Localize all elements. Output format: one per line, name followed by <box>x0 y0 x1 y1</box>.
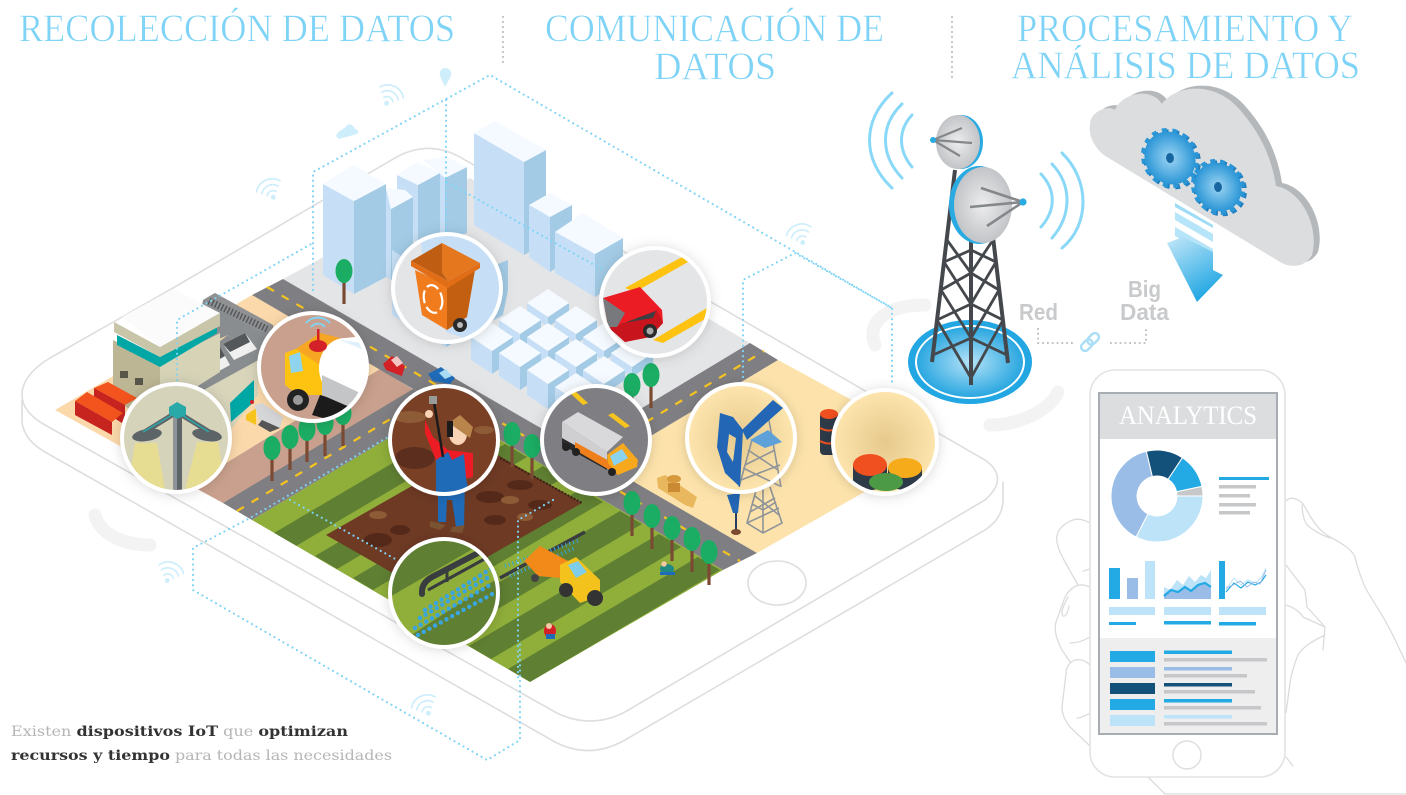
donut legend <box>1219 477 1269 514</box>
cloud with gears <box>1090 86 1320 302</box>
city ground <box>283 178 750 449</box>
circle: oil pump <box>687 384 795 492</box>
connector between red and big data <box>1038 328 1146 353</box>
wireless tower <box>870 93 1083 404</box>
caption text: Existen dispositivos IoT que optimizan <box>11 724 348 740</box>
analytics header: ANALYTICS <box>1119 401 1257 430</box>
area chart <box>1164 570 1211 599</box>
farmer legs <box>430 480 465 533</box>
line chart <box>1219 561 1266 599</box>
analytics header <box>1100 394 1276 439</box>
small red car <box>383 356 405 376</box>
title: procesamiento y análisis de datos <box>1011 7 1360 87</box>
title: comunicación de datos: COMUNICACIÓN DE <box>545 6 884 50</box>
donut chart <box>1111 450 1203 542</box>
title: procesamiento y análisis de datos: PROCESAMIENTO Y <box>1017 7 1353 50</box>
table panel <box>1100 638 1276 733</box>
circle: red car <box>601 248 709 356</box>
fuel truck <box>246 400 283 432</box>
title: comunicación de datos: DATOS <box>654 45 776 88</box>
small dish <box>930 115 983 169</box>
factory wing roof <box>160 335 262 392</box>
title: procesamiento y análisis de datos: ANÁLISIS DE DATOS <box>1011 43 1360 87</box>
factory wing wall <box>200 358 258 428</box>
circle: irrigation sprinkler <box>384 537 501 654</box>
buildings <box>323 121 623 347</box>
gear small <box>1191 158 1246 218</box>
factory ground <box>55 295 380 485</box>
tower base <box>908 320 1032 404</box>
large dish <box>949 166 1027 244</box>
label: big data <box>1120 276 1169 325</box>
low blocks <box>471 289 653 416</box>
roof grate <box>203 293 273 333</box>
title: comunicación de datos <box>545 6 884 88</box>
tractor with tank <box>500 532 603 606</box>
pipe valve <box>657 475 697 508</box>
circle: farmer with sensor <box>390 386 498 500</box>
caption text: recursos y tiempo para todas las necesidades <box>11 748 392 764</box>
tower lattice <box>932 170 1008 385</box>
faded background arcs <box>95 305 1058 545</box>
caption text <box>11 724 392 764</box>
label: big data: Big <box>1128 276 1161 302</box>
isometric map <box>55 121 905 682</box>
right road <box>574 343 778 465</box>
bar chart <box>1109 561 1155 599</box>
field worker 2 <box>660 561 675 575</box>
bin interior and rim <box>411 243 448 281</box>
trees <box>264 259 718 585</box>
floating wifi and cloud icons <box>155 68 815 720</box>
label: big data: Data <box>1120 299 1169 325</box>
circle: oil barrels <box>833 390 937 494</box>
smartphone <box>1090 370 1285 777</box>
office tower <box>113 340 160 425</box>
field worker <box>544 623 556 639</box>
chart captions <box>1109 607 1266 626</box>
service lot <box>195 293 275 358</box>
label: red: Red <box>1019 299 1058 325</box>
left road <box>223 389 442 520</box>
red containers <box>75 382 137 435</box>
hand holding phone <box>1055 498 1406 794</box>
skylights <box>170 333 257 388</box>
bin body <box>415 270 447 330</box>
tablet device outline <box>22 148 1003 751</box>
oil field ground <box>602 360 905 553</box>
signal waves right <box>1041 153 1083 248</box>
dotted network lines <box>177 75 892 760</box>
circle: street lamp <box>122 384 230 492</box>
outside barrel <box>820 409 838 455</box>
teal door <box>230 380 254 422</box>
title: recolección de datos: RECOLECCIÓN DE DATOS <box>19 6 455 50</box>
circle: delivery truck <box>542 386 650 494</box>
green field <box>252 438 723 682</box>
pump lower part <box>727 487 782 535</box>
pink strip <box>190 369 414 503</box>
gear large <box>1141 126 1201 191</box>
circle: recycling bin <box>393 232 505 342</box>
factory <box>113 289 275 428</box>
circle: street sweeper truck <box>259 313 375 421</box>
small blue car <box>428 367 455 384</box>
soil plot <box>326 446 582 592</box>
main road <box>252 279 757 570</box>
download arrow <box>1167 203 1223 302</box>
signal waves left <box>870 93 912 188</box>
